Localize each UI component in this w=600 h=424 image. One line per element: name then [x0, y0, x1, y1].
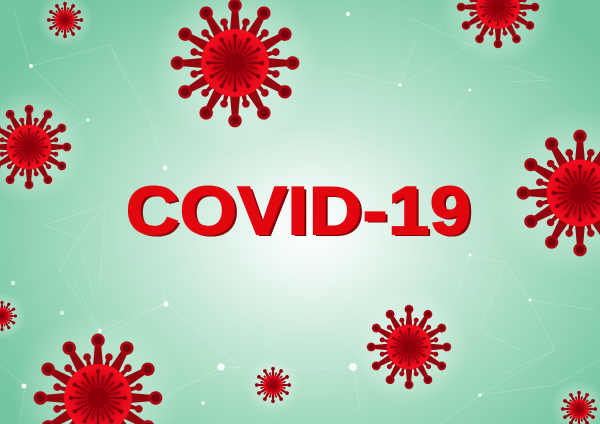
virus: left middle — [0, 105, 71, 189]
title: COVID-19 — [126, 173, 472, 249]
virus: lower right medium — [367, 305, 451, 389]
virus: top centre large — [171, 0, 299, 127]
virus: bottom centre small — [255, 367, 291, 403]
virus: top right — [457, 0, 539, 48]
virus: bottom left large — [34, 334, 162, 424]
virus: left edge tiny — [0, 301, 17, 331]
virus: right large — [517, 130, 600, 256]
virus: bottom right small — [561, 391, 597, 424]
virus: top left small — [47, 2, 83, 38]
